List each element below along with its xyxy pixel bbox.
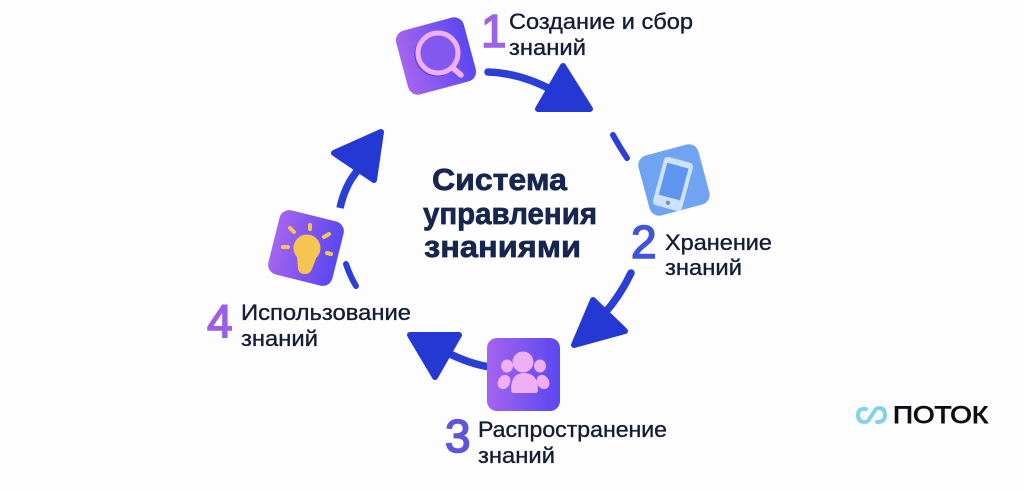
label: step 3: Распространение	[478, 417, 667, 442]
icon: light bulb tile	[266, 208, 346, 288]
arrow: fragment to step 2	[613, 135, 627, 158]
number 3: 3	[445, 410, 471, 462]
label: step 1: Создание и сбор	[509, 9, 693, 34]
title: Система	[432, 162, 568, 197]
label: step 4	[241, 300, 411, 351]
label: step 1	[509, 9, 693, 60]
arrow: step 2 to step 3	[574, 273, 631, 345]
icon: phone tile	[636, 142, 712, 218]
label: step 3: знаний	[478, 443, 555, 468]
title	[423, 162, 597, 264]
label: step 2	[665, 230, 772, 280]
icon: people tile	[487, 338, 560, 411]
arrow: step 1 to step 2	[488, 66, 590, 109]
label: step 3	[478, 417, 667, 468]
arrow: step 4 to step 1	[334, 132, 381, 208]
arrow: step 3 to step 4	[410, 335, 490, 377]
number 1: 1	[481, 5, 507, 57]
label: step 4: Использование	[241, 300, 411, 325]
icon: magnifier tile	[394, 15, 478, 97]
number 2: 2	[631, 216, 657, 268]
label: step 2: Хранение	[665, 230, 772, 255]
logo: Поток	[858, 402, 988, 429]
label: step 1: знаний	[509, 35, 586, 60]
label: step 4: знаний	[241, 326, 318, 351]
title: знаниями	[424, 229, 581, 264]
title: управления	[423, 196, 597, 231]
label: step 2: знаний	[665, 255, 742, 280]
number 4: 4	[207, 295, 233, 347]
arrow: fragment from step 3 to step 4	[346, 264, 356, 286]
logo: Поток: ПОТОК	[893, 402, 988, 429]
